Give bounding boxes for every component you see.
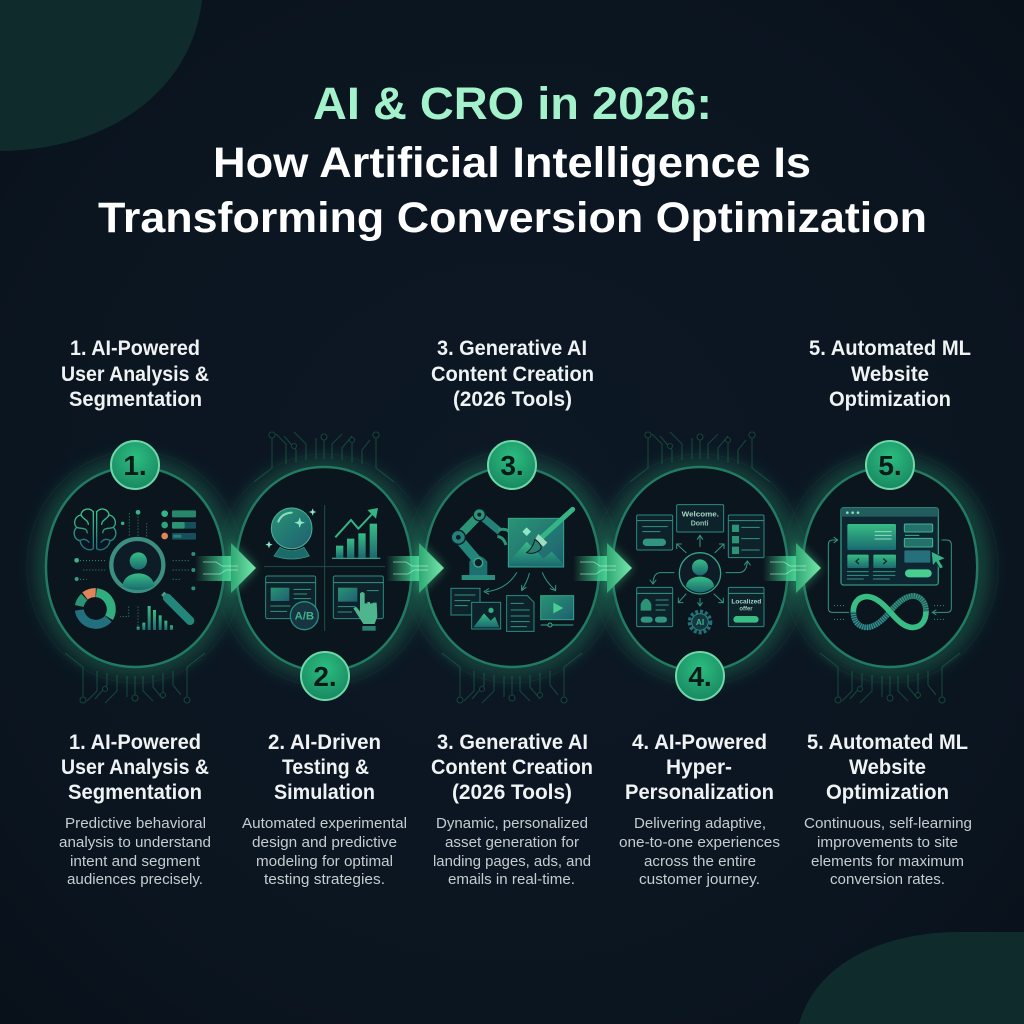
step 2 text (242, 731, 407, 888)
step 2 description: Automated experimental (242, 815, 407, 832)
icon: infinity loop (853, 596, 926, 627)
heading top 5: Optimization (829, 388, 951, 411)
icon: bar chart (137, 606, 173, 630)
icon: cursor (931, 551, 945, 569)
icon: feedback loops (828, 537, 951, 615)
step 3 description: emails in real-time. (448, 871, 575, 888)
badge 2: 2. (313, 661, 337, 692)
step 3 description: Dynamic, personalized (436, 815, 588, 832)
circle 3 (425, 467, 599, 667)
step 1 text (59, 731, 211, 888)
step 4 heading: 4. AI-Powered (632, 731, 767, 754)
badge 4 (676, 652, 724, 700)
icon: donut chart (79, 593, 111, 624)
title line 1: AI & CRO in 2026: (313, 78, 712, 129)
arrow 4 (763, 543, 821, 593)
step 5 heading: Optimization (826, 781, 949, 804)
decorative corner shape top left (0, 0, 202, 151)
badge 5 (866, 441, 914, 489)
circuit traces (65, 432, 960, 703)
title (98, 78, 927, 242)
badge 5: 5. (878, 450, 902, 481)
step 2 description: design and predictive (252, 834, 397, 851)
step 3 heading: 3. Generative AI (437, 731, 588, 754)
step 5 heading: Website (849, 756, 926, 779)
divider cross (264, 505, 385, 631)
step 5 heading: 5. Automated ML (807, 731, 968, 754)
icon: radiating arrows (650, 535, 750, 606)
icon: segment list (161, 510, 196, 540)
icon: image canvas (508, 518, 564, 567)
icon: top right window (728, 515, 764, 558)
icon group: testing and simulation (264, 505, 385, 631)
circle glows (46, 467, 979, 669)
heading top 3 (431, 337, 594, 411)
step 1 description (59, 815, 211, 888)
step 5 text (804, 731, 972, 888)
step 3 text (431, 731, 593, 888)
icon: bottom left window (637, 587, 673, 627)
icon: distribution arrows (484, 573, 556, 594)
icon: click window (333, 576, 383, 631)
circle 4 (612, 467, 788, 671)
badge 4: 4. (688, 661, 712, 692)
icon: brain (74, 509, 116, 550)
icon: localized offer card: Localized (731, 600, 762, 606)
step 4 description: customer journey. (639, 871, 760, 888)
step 1 description: analysis to understand (59, 834, 211, 851)
step 5 description: Continuous, self-learning (804, 815, 972, 832)
step 4 description: one-to-one experiences (619, 834, 780, 851)
step 4 heading: Personalization (625, 781, 774, 804)
icon: localized offer card (728, 587, 764, 627)
arrow 1 (195, 543, 256, 593)
step 1 description: intent and segment (70, 853, 201, 870)
heading top 5: Website (851, 363, 929, 386)
step 2 description: modeling for optimal (256, 853, 393, 870)
title line 2: How Artificial Intelligence Is (213, 139, 811, 187)
heading top 5: 5. Automated ML (809, 337, 971, 360)
step 2 heading: Testing & (282, 756, 369, 779)
arrow 2 (386, 543, 444, 593)
heading top 3: 3. Generative AI (437, 337, 587, 360)
icon: AI gear: AI (696, 617, 704, 627)
step 1 description: audiences precisely. (67, 871, 203, 888)
step 4 heading (625, 731, 774, 804)
icon: crystal ball (265, 508, 316, 559)
icon: paintbrush (527, 509, 573, 553)
step 5 description (804, 815, 972, 888)
step 4 description (619, 815, 780, 888)
heading top 3: (2026 Tools) (453, 388, 572, 411)
icon group: hyper-personalization (637, 505, 764, 633)
step 3 description: asset generation for (445, 834, 579, 851)
heading top 5 (809, 337, 971, 411)
heading top 1: Segmentation (69, 388, 202, 411)
circle 2 (236, 467, 412, 671)
badge 3: 3. (500, 450, 524, 481)
step 4 description: Delivering adaptive, (634, 815, 766, 832)
icon: central user (679, 553, 721, 594)
step 1 heading: User Analysis & (61, 756, 209, 779)
step 2 description (242, 815, 407, 888)
heading top 1: 1. AI-Powered (70, 337, 200, 360)
step 1 heading (61, 731, 209, 804)
icon: growth chart (332, 508, 380, 558)
heading top 3: Content Creation (431, 363, 594, 386)
outer rings (27, 451, 998, 686)
title line 3: Transforming Conversion Optimization (98, 194, 927, 242)
icon: top left window (637, 515, 673, 550)
step 5 description: improvements to site (817, 834, 958, 851)
icon: A/B test window: A/B (295, 611, 314, 623)
icon: welcome card: Welcome. (682, 510, 719, 519)
top headings (61, 337, 971, 411)
icon group: automated optimization (828, 508, 951, 627)
icon: welcome card (677, 505, 724, 532)
heading top 1: User Analysis & (61, 363, 209, 386)
step 3 description: landing pages, ads, and (433, 853, 591, 870)
decorative corner shape bottom right (799, 932, 1024, 1024)
step 5 heading (807, 731, 968, 804)
icon: content cards (451, 588, 574, 631)
arrow 3 (573, 543, 632, 593)
step 2 heading: Simulation (274, 781, 375, 804)
icon: data dots (74, 510, 195, 627)
step 5 description: elements for maximum (811, 853, 964, 870)
step 3 heading: (2026 Tools) (452, 781, 572, 804)
icon: infinity side marks (834, 606, 945, 619)
icon group: generative content (451, 509, 574, 631)
step 3 heading: Content Creation (431, 756, 593, 779)
icon group: user analysis (74, 509, 196, 630)
heading top 1 (61, 337, 209, 411)
step 2 heading: 2. AI-Driven (268, 731, 381, 754)
circle 1 (46, 467, 224, 667)
step 3 heading (431, 731, 593, 804)
step 2 heading (268, 731, 381, 804)
step 5 description: conversion rates. (830, 871, 945, 888)
step 4 description: across the entire (644, 853, 756, 870)
circle 5 (803, 467, 977, 667)
icon: localized offer card: offer (739, 607, 753, 613)
step 1 heading: 1. AI-Powered (69, 731, 201, 754)
step 3 description (433, 815, 591, 888)
step 2 description: testing strategies. (264, 871, 385, 888)
badge 1: 1. (123, 450, 147, 481)
badge 2 (301, 652, 349, 700)
badge 3 (488, 441, 536, 489)
step 4 heading: Hyper- (666, 756, 732, 779)
step 1 description: Predictive behavioral (65, 815, 206, 832)
step 1 heading: Segmentation (68, 781, 202, 804)
icon: magnifier with user (111, 539, 190, 621)
step 4 text (619, 731, 780, 888)
badge 1 (111, 441, 159, 489)
icon: website window (841, 508, 938, 585)
icon: welcome card: Donti (691, 521, 709, 528)
icon: robot arm (451, 509, 513, 580)
